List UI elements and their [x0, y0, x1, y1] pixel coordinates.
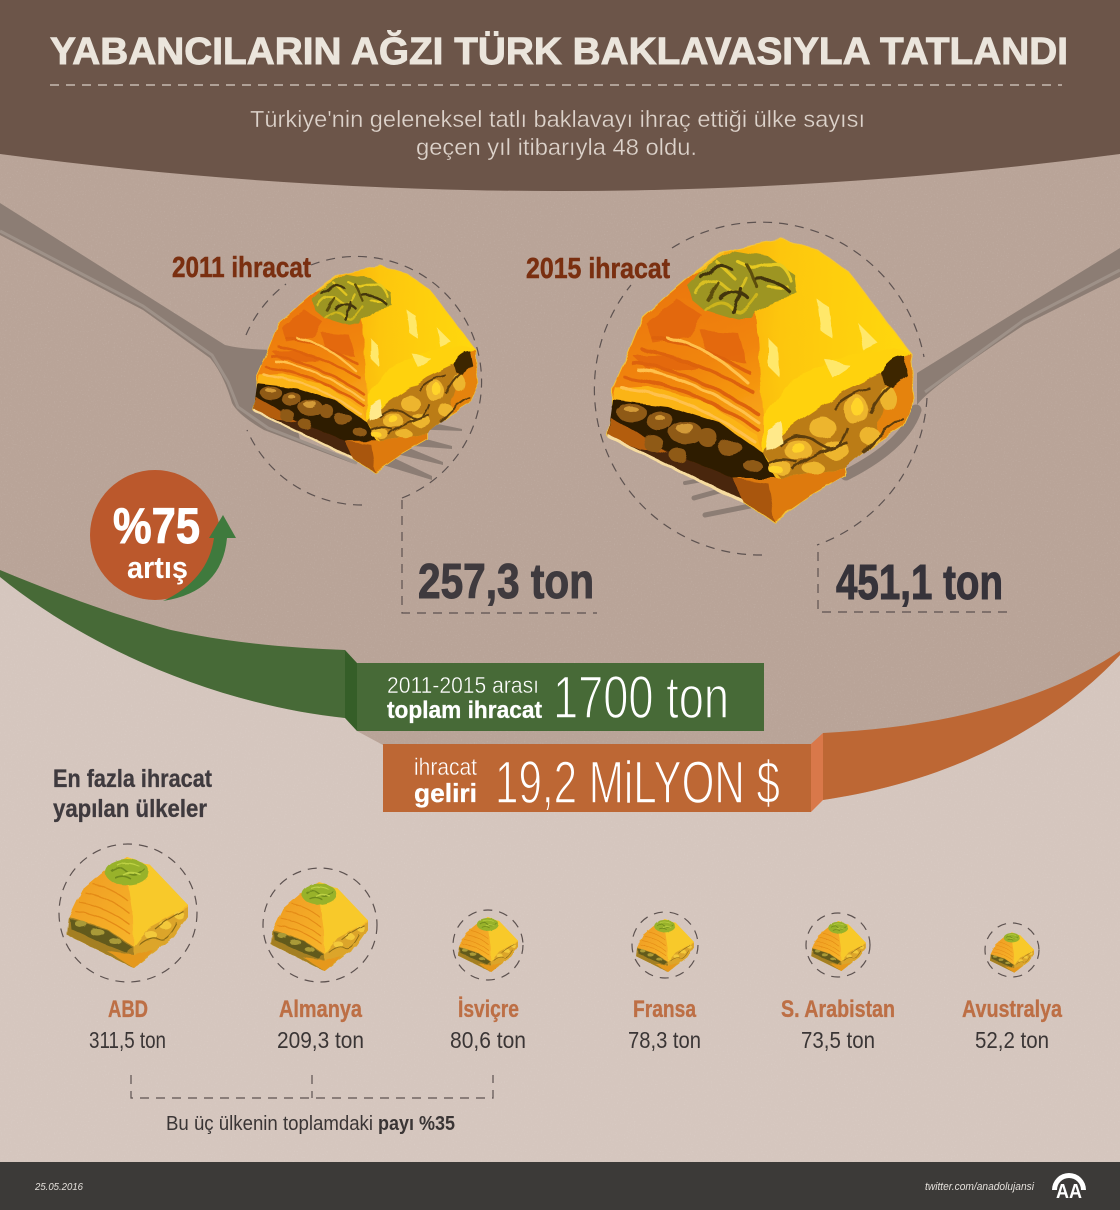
- country: S. Arabistan: 73,5 ton: [801, 1027, 875, 1053]
- icon: growth arrow: [163, 515, 236, 601]
- green ribbon: total export: 1700 ton: [553, 664, 729, 731]
- country: ABD: [59, 844, 197, 1053]
- header band: [0, 0, 1120, 191]
- value: 257,3 ton: 257,3 ton: [418, 555, 594, 609]
- country: S. Arabistan: [781, 913, 895, 1053]
- icon: AA logo: [1052, 1173, 1086, 1203]
- country: İsviçre: [450, 910, 526, 1053]
- orange ribbon: export revenue: geliri: [414, 778, 477, 808]
- subtitle: [250, 106, 865, 160]
- orange ribbon: export revenue: ihracat: [414, 754, 477, 781]
- label: 2011 ihracat: 2011 ihracat: [172, 252, 311, 284]
- country: Fransa: [628, 912, 701, 1053]
- country: İsviçre: 80,6 ton: [450, 1027, 526, 1053]
- title: YABANCILARIN AĞZI TÜRK BAKLAVASIYLA TATLANDI: [50, 29, 1068, 73]
- value: 451,1 ton: 451,1 ton: [836, 556, 1003, 610]
- green ribbon: total export: [0, 570, 764, 731]
- heading: top export countries: [53, 765, 213, 823]
- country: ABD: ABD: [108, 996, 148, 1023]
- country: ABD: 311,5 ton: [89, 1027, 166, 1053]
- country: Avustralya: 52,2 ton: [975, 1027, 1049, 1053]
- country: Avustralya: [962, 923, 1063, 1053]
- subtitle: geçen yıl itibarıyla 48 oldu.: [416, 134, 697, 160]
- icon: AA logo: AA: [1056, 1181, 1082, 1203]
- country: Fransa: 78,3 ton: [628, 1027, 701, 1053]
- subtitle: Türkiye'nin geleneksel tatlı baklavayı ihraç ettiği ülke sayısı: [250, 106, 865, 132]
- footer: [0, 1162, 1120, 1210]
- country: Almanya: 209,3 ton: [277, 1027, 364, 1053]
- country: S. Arabistan: S. Arabistan: [781, 996, 895, 1023]
- dashed circle 2015: [594, 222, 1008, 612]
- icon: baklava 2011: [254, 266, 478, 472]
- panel: 2015 export: [526, 222, 1120, 612]
- dashed circle 2011: [246, 256, 597, 613]
- bracket: three-country share: payı %35: [378, 1113, 455, 1135]
- label: 2015 ihracat: 2015 ihracat: [526, 253, 670, 285]
- country: Avustralya: Avustralya: [962, 996, 1063, 1023]
- bracket: three-country share: [131, 1075, 493, 1135]
- badge: %75 artış: [90, 470, 236, 601]
- icon: left fork: [0, 203, 462, 480]
- badge: %75 artış: %75: [113, 498, 200, 554]
- icon: baklava 2015: [608, 239, 915, 521]
- badge: %75 artış: artış: [127, 550, 188, 585]
- icon: right fork: [685, 248, 1120, 515]
- bracket: three-country share: Bu üç ülkenin toplamdaki: [166, 1113, 373, 1135]
- panel: 2011 export: [0, 203, 597, 613]
- footer: 25.05.2016: [34, 1182, 83, 1193]
- country: İsviçre: İsviçre: [458, 996, 519, 1023]
- footer: twitter.com/anadolujansi: [925, 1181, 1035, 1193]
- orange ribbon: export revenue: 19,2 MiLYON $: [495, 749, 780, 816]
- heading: top export countries: En fazla ihracat: [53, 765, 213, 793]
- country: Almanya: Almanya: [279, 996, 363, 1023]
- heading: top export countries: yapılan ülkeler: [53, 795, 207, 823]
- green ribbon: total export: 2011-2015 arası: [387, 672, 539, 698]
- green ribbon: total export: toplam ihracat: [387, 697, 542, 724]
- orange ribbon: export revenue: [383, 651, 1120, 816]
- country: Almanya: [263, 868, 377, 1053]
- country: Fransa: Fransa: [633, 996, 697, 1023]
